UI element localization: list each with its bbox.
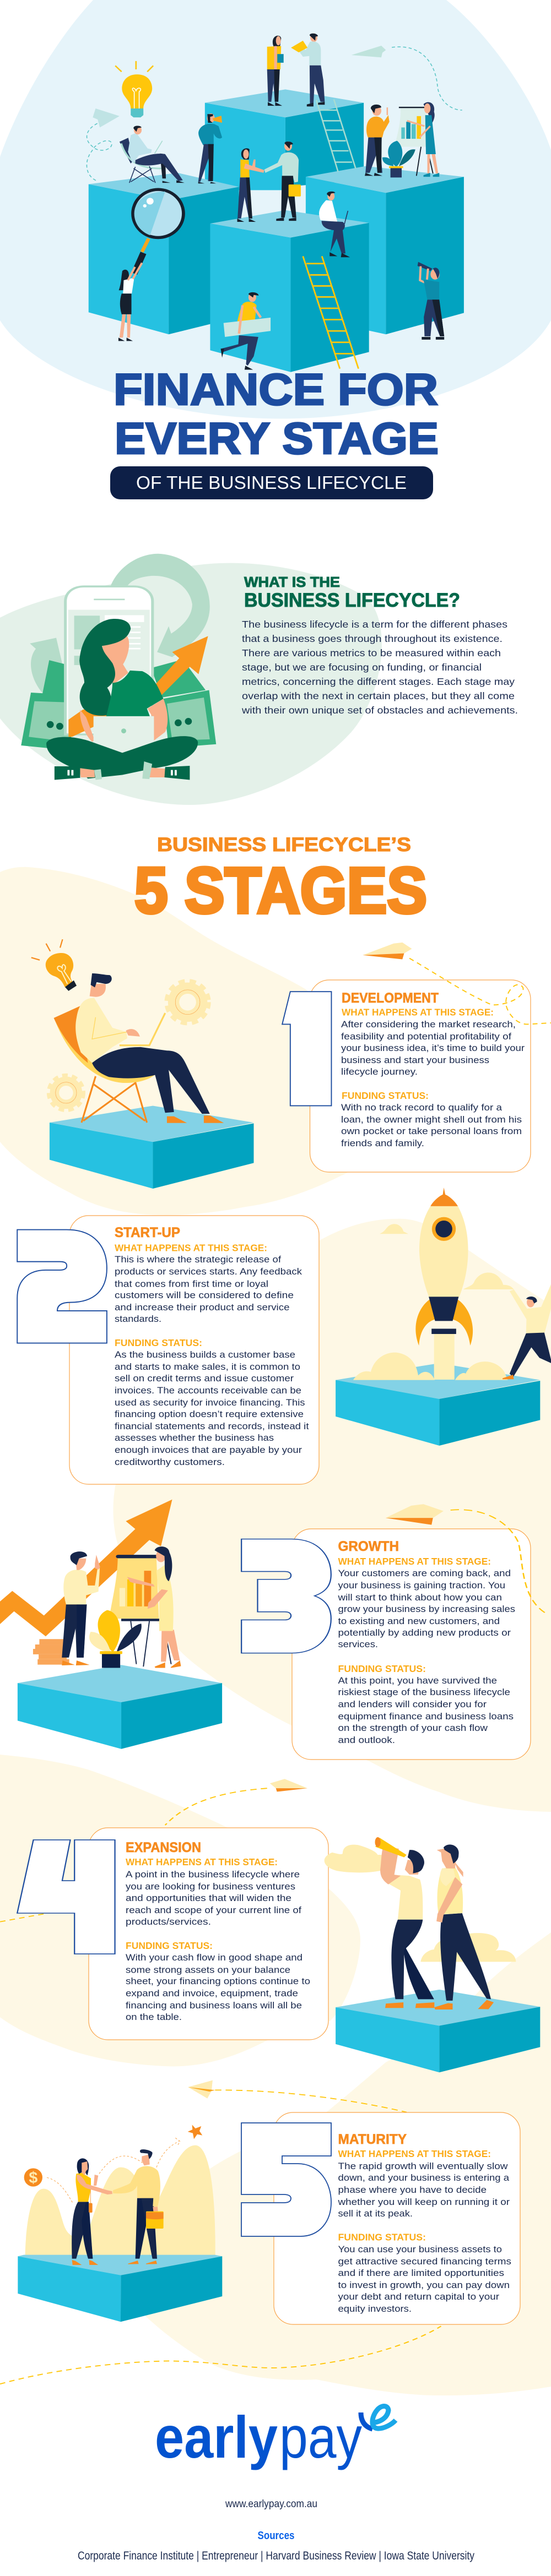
paper plane: top right xyxy=(352,46,386,57)
icon: dollar coin: $ xyxy=(29,2169,37,2187)
front cube xyxy=(210,210,369,372)
card text: financing option doesn’t require extensive xyxy=(115,1409,304,1419)
stage 4: expansion xyxy=(0,1779,540,2072)
rising arrow xyxy=(0,1500,172,1636)
card text: EXPANSION xyxy=(126,1840,201,1855)
intro paragraph: There are various metrics to be measured within each xyxy=(242,647,501,658)
card text: your business idea, it’s time to build your xyxy=(341,1043,525,1053)
illustration: handshake on platform xyxy=(18,2125,222,2322)
card text: FUNDING STATUS: xyxy=(115,1337,202,1348)
card text: With no track record to qualify for a xyxy=(341,1103,503,1113)
paper plane and dashed path xyxy=(363,943,551,1024)
clouds xyxy=(353,1224,514,1380)
panel: growth card xyxy=(292,1529,531,1760)
illustration: woman with phone and money xyxy=(21,554,216,780)
card text: With your cash flow in good shape and xyxy=(126,1953,302,1963)
card text: WHAT HAPPENS AT THIS STAGE: xyxy=(338,1556,491,1567)
card text: phase where you have to decide xyxy=(338,2185,487,2195)
card text: START-UP xyxy=(115,1225,180,1240)
subtitle pill xyxy=(110,466,433,499)
platform xyxy=(18,1665,222,1749)
card text: to invest in growth, you can pay down xyxy=(338,2280,510,2290)
ladder: green xyxy=(316,100,355,172)
card text: FUNDING STATUS: xyxy=(126,1940,213,1951)
chair xyxy=(54,1006,156,1123)
card text: you are looking for business ventures xyxy=(126,1882,295,1892)
person: woman presenting xyxy=(127,1546,181,1668)
logo mark: e swirl xyxy=(361,2406,396,2429)
phone xyxy=(66,586,153,734)
paper plane: left xyxy=(93,108,120,127)
person: man with megaphone xyxy=(198,113,222,183)
logo: earlypay: pay xyxy=(279,2404,362,2470)
card text: grow your business by increasing sales xyxy=(338,1604,515,1614)
stage 5: maturity xyxy=(18,2081,520,2324)
mountains xyxy=(25,2145,215,2256)
card text: creditworthy customers. xyxy=(115,1457,225,1467)
logo: earlypay xyxy=(155,2404,396,2470)
circular arrow xyxy=(111,554,210,660)
money stacks xyxy=(21,660,216,750)
panel: maturity card xyxy=(274,2112,520,2324)
illustration: two people with telescope xyxy=(325,1837,540,2072)
card text: get attractive secured financing terms xyxy=(338,2257,511,2267)
woman xyxy=(46,619,198,780)
card text: business and start your business xyxy=(341,1055,489,1065)
hero section xyxy=(0,0,551,499)
person: man with telescope xyxy=(375,1837,434,2008)
dashed path above logo xyxy=(0,2326,441,2384)
card text: and starts to make sales, it is common to xyxy=(115,1362,300,1372)
card text: expand and invoice, equipment, trade xyxy=(126,1989,298,1998)
logo: earlypay: early xyxy=(155,2404,278,2470)
card text: services. xyxy=(338,1640,378,1649)
sources heading: Sources xyxy=(258,2530,294,2542)
card text: and opportunities that will widen the xyxy=(126,1893,291,1903)
intro paragraph: overlap with the next in certain places, but they all come xyxy=(242,690,515,701)
heading: what is the business lifecycle: WHAT IS THE xyxy=(244,574,340,590)
card text: own pocket or take personal loans from xyxy=(341,1126,522,1136)
card text: This is where the strategic release of xyxy=(115,1255,281,1265)
rocket xyxy=(415,1188,473,1380)
card text xyxy=(115,1225,309,1467)
subtitle pill: OF THE BUSINESS LIFECYCLE xyxy=(136,472,407,493)
icon: star xyxy=(188,2125,202,2139)
card text: friends and family. xyxy=(341,1139,424,1148)
arrow tail behind left xyxy=(30,638,63,693)
card text: sheet, your financing options continue to xyxy=(126,1976,310,1986)
person: man presenting xyxy=(62,1551,100,1665)
back cube xyxy=(205,89,364,190)
card text: some strong assets on your balance xyxy=(126,1965,290,1975)
card text: The rapid growth will eventually slow xyxy=(338,2161,508,2171)
numeral 5 xyxy=(241,2123,331,2236)
dashed flight path into stage 4 xyxy=(165,1779,307,1825)
gears xyxy=(48,981,209,1110)
person xyxy=(75,973,224,1123)
title: FINANCE FOR EVERY STAGE xyxy=(114,365,439,464)
card text: feasibility and potential profitability of xyxy=(341,1032,511,1042)
card text: equipment finance and business loans xyxy=(338,1712,514,1722)
icon: dollar coin xyxy=(24,2168,42,2187)
card text: As the business builds a customer base xyxy=(115,1350,295,1360)
stage 1: development xyxy=(31,939,551,1189)
card text: WHAT HAPPENS AT THIS STAGE: xyxy=(126,1856,278,1867)
card text: lifecycle journey. xyxy=(341,1067,418,1077)
intro paragraph: with their own unique set of obstacles and achievements. xyxy=(241,705,518,716)
card text: and increase their product and service xyxy=(115,1303,290,1312)
panel: expansion card xyxy=(89,1828,328,2040)
card text: whether you will keep on running it or xyxy=(337,2197,510,2207)
card text: You can use your business assets to xyxy=(338,2245,502,2254)
dashed flight paths xyxy=(87,47,462,181)
platform xyxy=(336,1363,540,1446)
person: man carrying panel xyxy=(221,292,271,369)
magnifying glass xyxy=(133,189,183,274)
card text: DEVELOPMENT xyxy=(342,990,439,1006)
card text: customers will be considered to define xyxy=(115,1290,294,1300)
person: man with binoculars xyxy=(418,262,444,340)
card text: loan, the owner might shell out from his xyxy=(341,1115,522,1125)
person: man presenting xyxy=(365,105,390,176)
card text: will start to think about how you can xyxy=(337,1593,502,1603)
card text: financial statements and records, instead it xyxy=(115,1422,309,1431)
card text xyxy=(341,990,525,1148)
paper plane and dashed path xyxy=(188,2081,407,2112)
potted plant xyxy=(89,1610,142,1668)
card text: on the strength of your cash flow xyxy=(338,1723,488,1733)
illustration: rocket launch xyxy=(336,1188,551,1446)
person: man standing xyxy=(434,1844,494,2009)
title: FINANCE FOR EVERY STAGE: FINANCE FOR xyxy=(114,365,438,415)
card text: At this point, you have survived the xyxy=(338,1676,497,1686)
card text: sell it at its peak. xyxy=(338,2209,413,2219)
card text: and outlook. xyxy=(338,1735,395,1745)
card text: standards. xyxy=(115,1314,161,1324)
stage 3: growth xyxy=(0,1500,548,1760)
potted plant xyxy=(382,141,415,177)
illustration: man in chair xyxy=(31,939,253,1189)
card text: potentially by adding new products or xyxy=(338,1628,511,1638)
numeral 3 xyxy=(241,1539,331,1653)
card text: products or services starts. Any feedback xyxy=(115,1267,302,1277)
card text: your debt and return capital to your xyxy=(338,2292,500,2302)
person: woman xyxy=(72,2158,112,2265)
card text: MATURITY xyxy=(338,2132,407,2147)
hero background blob xyxy=(0,0,551,419)
stage 2: start-up xyxy=(17,1188,551,1484)
illustration: presentation and rising arrow xyxy=(0,1500,222,1749)
card text: and if there are limited opportunities xyxy=(338,2268,504,2278)
panel: development card xyxy=(310,980,531,1172)
card text: enough invoices that are payable by your xyxy=(115,1445,302,1455)
card text: down, and your business is entering a xyxy=(338,2173,510,2183)
numeral 4 xyxy=(17,1840,115,1954)
card text: A point in the business lifecycle where xyxy=(126,1870,300,1880)
card text: sell on credit terms and issue customer xyxy=(115,1374,294,1384)
person: woman shaking hands xyxy=(237,148,264,222)
heading: what is the business lifecycle xyxy=(244,574,460,611)
dashed path left of numeral 4 xyxy=(0,1914,44,1922)
icon: light bulb xyxy=(115,61,153,117)
person: man with briefcase xyxy=(113,2149,164,2264)
card text: reach and scope of your current line of xyxy=(126,1905,301,1915)
website url: www.earlypay.com.au xyxy=(225,2498,317,2510)
intro paragraph: metrics, concerning the different stages. Each stage may xyxy=(242,676,515,687)
person: man shaking hands with briefcase xyxy=(264,141,301,221)
card text: assesses whether the business has xyxy=(115,1433,274,1443)
person: woman holding magnifying glass xyxy=(118,263,142,341)
card text: FUNDING STATUS: xyxy=(342,1090,429,1101)
clouds xyxy=(325,1845,516,1962)
heading: business lifecycle's 5 stages: BUSINESS LIFECYCLE’S xyxy=(157,834,411,856)
card text: equity investors. xyxy=(338,2304,412,2314)
person: woman with document xyxy=(267,36,284,106)
chart board xyxy=(109,1555,171,1666)
growth arrow xyxy=(68,636,208,737)
card text: WHAT HAPPENS AT THIS STAGE: xyxy=(342,1006,494,1017)
card text: Your customers are coming back, and xyxy=(338,1569,511,1578)
card text xyxy=(337,2132,511,2314)
intro paragraph: The business lifecycle is a term for the different phases xyxy=(242,619,507,630)
person: man sitting with laptop xyxy=(319,192,350,257)
ladder: yellow xyxy=(303,256,359,369)
icon: light bulb xyxy=(31,939,77,991)
green background blob xyxy=(0,563,382,805)
heading: business lifecycle's 5 stages: 5 STAGES xyxy=(134,854,427,927)
cream background blobs xyxy=(0,867,551,2395)
numeral 1 xyxy=(282,992,331,1105)
panel: start-up card xyxy=(69,1216,319,1484)
left cube xyxy=(89,173,239,334)
card text: WHAT HAPPENS AT THIS STAGE: xyxy=(338,2148,491,2159)
intro paragraph: that a business goes through throughout its existence. xyxy=(242,633,503,644)
card text: FUNDING STATUS: xyxy=(338,2232,426,2243)
card text: invoices. The accounts receivable can be xyxy=(115,1386,301,1396)
person: woman at board xyxy=(407,102,439,177)
presentation board with bar chart xyxy=(395,107,433,176)
platform xyxy=(18,2255,222,2322)
card text: your business is gaining traction. You xyxy=(338,1581,505,1591)
card text: GROWTH xyxy=(338,1539,399,1554)
card text: financing and business loans will all be xyxy=(126,2001,302,2011)
person: celebrating xyxy=(503,1284,551,1379)
card text: riskiest stage of the business lifecycle xyxy=(338,1687,510,1697)
panel: what is the business lifecycle xyxy=(0,554,518,805)
card text: that comes from first time or loyal xyxy=(115,1279,268,1289)
platform xyxy=(50,1105,253,1189)
intro paragraph xyxy=(241,619,518,716)
card text: After considering the market research, xyxy=(341,1020,516,1030)
title: FINANCE FOR EVERY STAGE: EVERY STAGE xyxy=(115,414,439,464)
card text: on the table. xyxy=(126,2012,182,2022)
coin stack xyxy=(33,1639,69,1665)
platform xyxy=(336,1990,540,2072)
card text: products/services. xyxy=(126,1917,211,1927)
dashed growth path xyxy=(47,2138,180,2204)
card text: FUNDING STATUS: xyxy=(338,1663,426,1674)
person: man with folder xyxy=(291,34,325,106)
card text: used as security for invoice financing. This xyxy=(115,1398,305,1408)
numeral 2 xyxy=(17,1230,107,1343)
heading: what is the business lifecycle: BUSINESS LIFECYCLE? xyxy=(244,590,460,611)
card text: to existing and new customers, and xyxy=(338,1616,500,1626)
right cube xyxy=(306,166,464,334)
card text xyxy=(126,1840,310,2022)
card text: and lenders will consider you for xyxy=(338,1700,487,1709)
person: man in lounge chair with laptop xyxy=(120,126,185,183)
card text: WHAT HAPPENS AT THIS STAGE: xyxy=(115,1242,267,1253)
paper plane and dashed path xyxy=(386,1504,548,1614)
hero illustration: cubes and team xyxy=(87,34,464,372)
sources list: Corporate Finance Institute | Entrepreneur | Harvard Business Review | Iowa State University xyxy=(78,2550,474,2562)
intro paragraph: stage, but we are focusing on funding, or financial xyxy=(242,662,482,673)
card text xyxy=(337,1539,515,1745)
